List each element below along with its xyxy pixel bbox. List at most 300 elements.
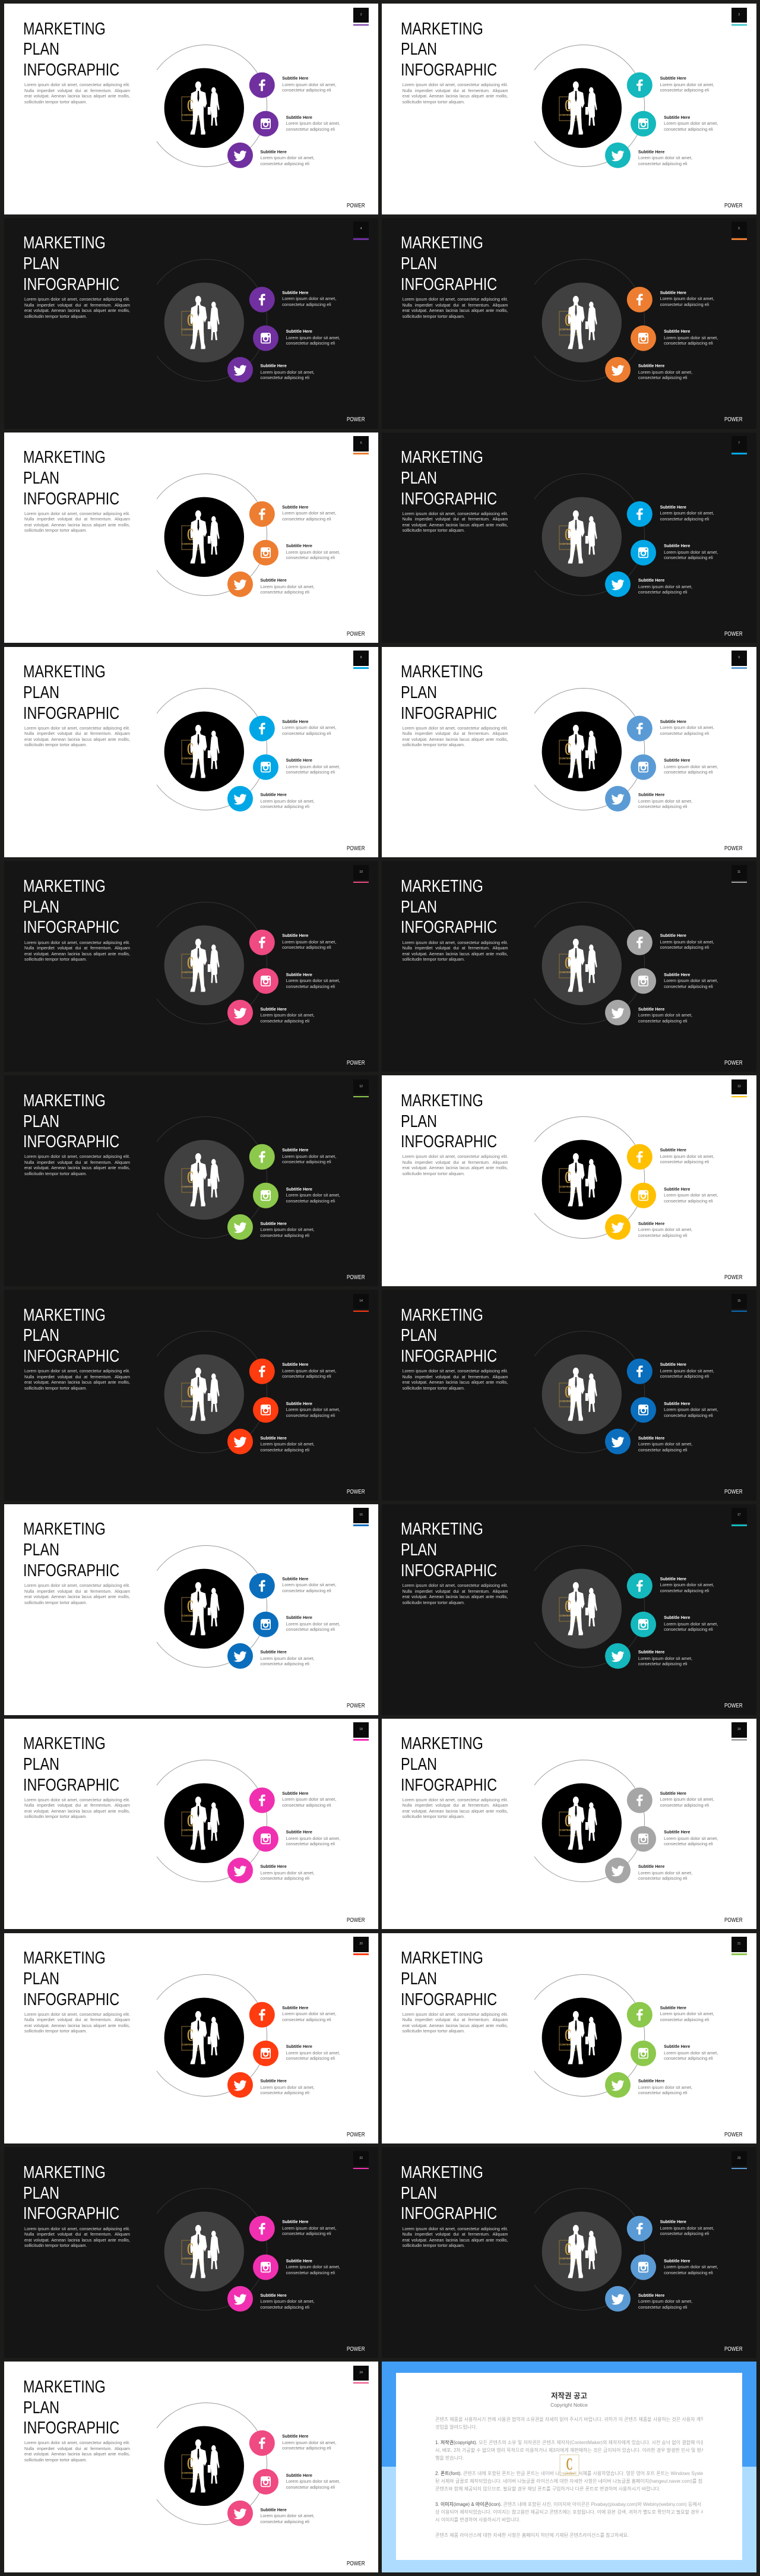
icon: facebook — [636, 1794, 643, 1806]
body text: erat volutpat. Aenean lacinia lacus aliquet ante mollis, — [24, 1594, 130, 1599]
page number: 22 — [359, 2157, 363, 2160]
center circle — [542, 926, 622, 1005]
page number: 8 — [360, 656, 362, 659]
title: INFOGRAPHIC — [401, 918, 497, 937]
callout 1: Lorem ipsum dolor sit amet, — [660, 510, 714, 516]
title: PLAN — [401, 1540, 437, 1560]
page number: 24 — [359, 2371, 363, 2375]
callout 3: consectetur adipiscing eli — [260, 2519, 309, 2524]
callout 2 — [664, 329, 718, 346]
title: INFOGRAPHIC — [401, 490, 497, 509]
callout 2 — [664, 971, 718, 989]
callout 1 — [660, 2218, 714, 2237]
page number: 21 — [737, 1942, 740, 1946]
social circles — [605, 72, 656, 168]
watermark logo: CONTENT — [563, 2472, 576, 2475]
callout 1 — [282, 2004, 336, 2022]
callout 1: Lorem ipsum dolor sit amet, — [282, 510, 336, 516]
callout 3: consectetur adipiscing eli — [260, 1661, 309, 1666]
title: PLAN — [401, 1969, 437, 1988]
people silhouettes — [190, 510, 219, 563]
body text: sollicitudin tempor tortor aliquam. — [24, 528, 87, 533]
icon: twitter — [612, 2294, 625, 2305]
diagram — [534, 473, 656, 597]
page number — [353, 865, 369, 880]
title: PLAN — [23, 1969, 59, 1988]
callout 2: Subtitle Here — [286, 329, 312, 334]
body text — [403, 2226, 508, 2249]
icon: facebook — [636, 1580, 643, 1592]
body text: Lorem ipsum dolor sit amet, consectetur adipiscing elit. — [24, 1583, 130, 1588]
icon: instagram — [260, 1619, 271, 1630]
light blue lower band — [382, 2467, 756, 2572]
icon: twitter — [612, 1437, 625, 1447]
logo: CONTENT — [182, 328, 194, 331]
body text: Nulla imperdiet volutpat dui at fermentum. Aliquam — [24, 1802, 130, 1808]
icon: instagram — [638, 118, 648, 129]
page number: 15 — [737, 1299, 740, 1302]
logo letter: C — [186, 740, 194, 758]
panel: slide 16 — [4, 1504, 378, 1715]
accent bar — [353, 2168, 369, 2169]
callout 3: Subtitle Here — [638, 1649, 664, 1655]
accent bar — [353, 453, 369, 454]
diagram — [4, 2147, 378, 2358]
callout 1: Subtitle Here — [660, 75, 686, 81]
callout 1: Lorem ipsum dolor sit amet, — [282, 296, 336, 301]
callout 1: consectetur adipiscing eli — [282, 87, 331, 93]
title: INFOGRAPHIC — [23, 704, 119, 723]
center circle — [542, 1568, 622, 1649]
accent bar — [353, 1311, 369, 1312]
title: INFOGRAPHIC — [23, 1132, 119, 1151]
title — [401, 1519, 497, 1581]
callout 3 — [260, 1649, 315, 1667]
callout 1: consectetur adipiscing eli — [282, 1588, 331, 1593]
body text: Nulla imperdiet volutpat dui at fermentum. Aliquam — [24, 2017, 130, 2022]
icon: twitter — [233, 1865, 246, 1876]
page number: 12 — [359, 1085, 363, 1088]
title: INFOGRAPHIC — [23, 1347, 119, 1366]
body text: Nulla imperdiet volutpat dui at fermentum. Aliquam — [24, 1160, 130, 1165]
title: INFOGRAPHIC — [401, 1990, 497, 2009]
callout 3 — [638, 1863, 692, 1882]
orbit ring — [157, 1117, 267, 1239]
notice text: 행을 받습니다. — [435, 2455, 464, 2461]
title — [401, 233, 497, 294]
body text: sollicitudin tempor tortor aliquam. — [403, 1171, 465, 1176]
page number: 19 — [737, 1728, 740, 1731]
accent bar — [732, 453, 747, 454]
orbit ring — [157, 1331, 267, 1453]
orbit ring — [157, 2189, 267, 2310]
icon: facebook — [259, 722, 265, 734]
logo — [559, 1598, 577, 1621]
title: PLAN — [401, 1326, 437, 1345]
icon: twitter — [612, 1008, 625, 1019]
logo — [559, 311, 577, 335]
callout 3: consectetur adipiscing eli — [638, 1447, 687, 1452]
center circle — [542, 1783, 622, 1863]
body text: sollicitudin tempor tortor aliquam. — [403, 742, 465, 747]
brand: POWER — [347, 1917, 365, 1924]
callout 3: consectetur adipiscing eli — [260, 160, 309, 166]
diagram — [382, 1075, 756, 1286]
icon: instagram — [260, 1833, 271, 1844]
callout 3: Subtitle Here — [260, 577, 287, 583]
body text: Lorem ipsum dolor sit amet, consectetur adipiscing elit. — [24, 82, 130, 87]
page number — [732, 865, 747, 880]
logo: CONTENT — [182, 757, 194, 759]
callout 1: consectetur adipiscing eli — [660, 2016, 709, 2022]
logo: CONTENT — [559, 1614, 572, 1617]
title — [23, 2163, 119, 2224]
logo letter: C — [565, 2026, 571, 2044]
icon: facebook — [259, 1794, 265, 1806]
callout 3: consectetur adipiscing eli — [260, 2090, 309, 2095]
callout 3 — [260, 2506, 315, 2524]
accent bar — [353, 2382, 369, 2384]
center circle — [542, 2212, 622, 2291]
callout 2 — [286, 114, 340, 132]
body text: sollicitudin tempor tortor aliquam. — [24, 1814, 87, 1819]
page number — [732, 1294, 747, 1309]
body text — [403, 511, 508, 533]
callout 3 — [260, 1006, 315, 1024]
callout 1 — [282, 1361, 336, 1379]
panel: slide 12 — [4, 1075, 378, 1286]
social circles — [227, 2002, 278, 2097]
callout 3: Subtitle Here — [638, 2293, 664, 2298]
logo: CONTENT — [559, 757, 572, 759]
body text: Nulla imperdiet volutpat dui at fermentum. Aliquam — [403, 1374, 508, 1379]
social circles — [605, 1359, 656, 1454]
body text: sollicitudin tempor tortor aliquam. — [403, 528, 465, 533]
title: MARKETING — [23, 448, 105, 467]
body text: Nulla imperdiet volutpat dui at fermentum. Aliquam — [403, 2017, 508, 2022]
diagram — [157, 688, 278, 812]
center circle — [164, 1997, 243, 2077]
callout 2: Subtitle Here — [286, 543, 312, 548]
body text: Nulla imperdiet volutpat dui at fermentum. Aliquam — [24, 731, 130, 736]
people silhouettes — [190, 725, 219, 778]
orbit ring — [534, 259, 645, 381]
callout 2: Lorem ipsum dolor sit amet, — [286, 2479, 340, 2484]
icon: twitter — [612, 579, 625, 590]
callout 1: Lorem ipsum dolor sit amet, — [660, 939, 714, 945]
callout 2 — [286, 1400, 340, 1418]
callout 3: Lorem ipsum dolor sit amet, — [638, 1656, 692, 1661]
callout 2: consectetur adipiscing eli — [286, 555, 335, 560]
body text: erat volutpat. Aenean lacinia lacus aliquet ante mollis, — [24, 93, 130, 99]
title: INFOGRAPHIC — [23, 2204, 119, 2223]
callout 3: Lorem ipsum dolor sit amet, — [638, 2299, 692, 2304]
icon: twitter — [233, 1651, 246, 1662]
title — [401, 448, 497, 509]
social circles — [227, 2216, 278, 2312]
callout 3: Subtitle Here — [638, 1435, 664, 1440]
body text — [24, 511, 130, 533]
logo — [182, 1383, 198, 1407]
logo: CONTENT — [182, 542, 194, 545]
page number — [353, 1722, 369, 1738]
accent bar — [353, 238, 369, 240]
callout 2: Lorem ipsum dolor sit amet, — [286, 335, 340, 340]
callout 3: Subtitle Here — [260, 363, 287, 368]
panel: slide 15 — [382, 1290, 756, 1501]
body text: Nulla imperdiet volutpat dui at fermentum. Aliquam — [403, 516, 508, 522]
callout 2: Lorem ipsum dolor sit amet, — [286, 2050, 340, 2056]
brand: POWER — [347, 1702, 365, 1709]
body text: Lorem ipsum dolor sit amet, consectetur adipiscing elit. — [24, 511, 130, 516]
body text — [24, 82, 130, 105]
diagram — [157, 473, 278, 597]
callout 1 — [282, 504, 336, 522]
logo — [182, 2240, 198, 2264]
body text: sollicitudin tempor tortor aliquam. — [24, 1385, 87, 1391]
callout 1: Lorem ipsum dolor sit amet, — [660, 1368, 714, 1374]
callout 3 — [260, 791, 315, 809]
body text: Lorem ipsum dolor sit amet, consectetur adipiscing elit. — [403, 725, 508, 731]
body text — [24, 1797, 130, 1820]
callout 1: Lorem ipsum dolor sit amet, — [282, 939, 336, 945]
callout 1 — [282, 719, 336, 735]
callout 3: consectetur adipiscing eli — [260, 1447, 309, 1452]
callout 3: consectetur adipiscing eli — [638, 589, 687, 595]
social circles — [227, 1359, 278, 1454]
logo letter: C — [565, 525, 571, 544]
body text: sollicitudin tempor tortor aliquam. — [24, 2028, 87, 2034]
logo: CONTENT — [182, 2043, 194, 2046]
callout 3: Lorem ipsum dolor sit amet, — [260, 1441, 315, 1447]
callout 2: consectetur adipiscing eli — [286, 340, 335, 346]
body text: Lorem ipsum dolor sit amet, consectetur adipiscing elit. — [403, 296, 508, 302]
callout 2: Lorem ipsum dolor sit amet, — [664, 2050, 718, 2056]
icon: instagram — [260, 2048, 271, 2059]
body text — [24, 2012, 130, 2034]
title: INFOGRAPHIC — [401, 704, 497, 723]
body text — [24, 1583, 130, 1605]
callout 2: Subtitle Here — [286, 972, 312, 977]
icon: instagram — [638, 1619, 648, 1630]
callout 2 — [286, 1614, 340, 1633]
body text: erat volutpat. Aenean lacinia lacus aliquet ante mollis, — [24, 308, 130, 313]
brand: POWER — [724, 1274, 743, 1281]
body text: sollicitudin tempor tortor aliquam. — [403, 956, 465, 962]
social circles — [605, 1144, 656, 1240]
icon: instagram — [260, 976, 271, 986]
callout 1: consectetur adipiscing eli — [660, 945, 709, 950]
logo — [559, 954, 577, 978]
callout 3: Subtitle Here — [638, 2078, 664, 2083]
title: MARKETING — [401, 233, 483, 252]
callout 1 — [660, 932, 714, 951]
accent bar — [353, 1739, 369, 1741]
body text: sollicitudin tempor tortor aliquam. — [24, 742, 87, 747]
diagram — [382, 646, 756, 858]
accent bar — [353, 667, 369, 669]
page number — [353, 1937, 369, 1952]
icon: twitter — [612, 365, 625, 375]
callout 3: Lorem ipsum dolor sit amet, — [638, 1441, 692, 1447]
callout 1: Subtitle Here — [660, 2219, 686, 2224]
icon: twitter — [612, 1223, 625, 1233]
title: INFOGRAPHIC — [401, 1561, 497, 1580]
callout 3: Lorem ipsum dolor sit amet, — [638, 370, 692, 375]
callout 1: Lorem ipsum dolor sit amet, — [282, 725, 336, 730]
title: PLAN — [401, 2184, 437, 2203]
callout 1: consectetur adipiscing eli — [660, 302, 709, 307]
callout 2: Lorem ipsum dolor sit amet, — [664, 121, 718, 126]
callout 2: consectetur adipiscing eli — [286, 1198, 335, 1204]
callout 2: consectetur adipiscing eli — [664, 1413, 713, 1418]
icon: twitter — [233, 794, 246, 804]
title: INFOGRAPHIC — [23, 2419, 119, 2438]
center circle — [542, 1997, 622, 2077]
title: MARKETING — [401, 662, 483, 681]
logo — [559, 1383, 577, 1407]
title — [23, 448, 119, 509]
callout 2: consectetur adipiscing eli — [286, 2056, 335, 2061]
page number: 4 — [360, 227, 362, 231]
callout 3 — [638, 1434, 692, 1453]
diagram — [382, 2147, 756, 2358]
callout 1: Lorem ipsum dolor sit amet, — [282, 1582, 336, 1587]
callout 1: Subtitle Here — [282, 1791, 308, 1796]
callout 3 — [260, 2078, 315, 2096]
callout 2: consectetur adipiscing eli — [286, 1841, 335, 1846]
callout 1: Lorem ipsum dolor sit amet, — [660, 2225, 714, 2231]
logo — [559, 2026, 577, 2050]
icon: facebook — [636, 80, 643, 91]
brand: POWER — [724, 630, 743, 637]
callout 2: Subtitle Here — [664, 329, 690, 334]
icon: twitter — [233, 1223, 246, 1233]
title: PLAN — [401, 1755, 437, 1774]
title: MARKETING — [23, 1306, 105, 1325]
callout 2 — [664, 1186, 718, 1204]
title — [401, 2163, 497, 2224]
callout 2: Subtitle Here — [664, 1829, 690, 1835]
brand: POWER — [347, 1488, 365, 1495]
body text — [24, 296, 130, 319]
accent bar — [732, 1739, 747, 1741]
callout 2: Lorem ipsum dolor sit amet, — [286, 1192, 340, 1198]
callout 2: Subtitle Here — [664, 1186, 690, 1192]
body text: sollicitudin tempor tortor aliquam. — [403, 2243, 465, 2248]
center circle — [164, 926, 243, 1005]
panel: copyright notice — [382, 2362, 756, 2572]
title: PLAN — [401, 898, 437, 917]
body text: Nulla imperdiet volutpat dui at fermentum. Aliquam — [403, 1589, 508, 1594]
title — [23, 1948, 119, 2010]
panel: slide 3 — [382, 4, 756, 214]
callout 2 — [286, 329, 340, 346]
social circles — [227, 2430, 278, 2526]
body text: Nulla imperdiet volutpat dui at fermentum. Aliquam — [24, 2231, 130, 2237]
body text: Lorem ipsum dolor sit amet, consectetur adipiscing elit. — [403, 1797, 508, 1802]
social circles — [227, 930, 278, 1025]
icon: facebook — [259, 937, 265, 948]
callout 3 — [260, 577, 315, 595]
accent bar — [732, 1311, 747, 1312]
callout 1: Lorem ipsum dolor sit amet, — [660, 296, 714, 301]
callout 1: Subtitle Here — [660, 290, 686, 295]
brand: POWER — [724, 1917, 743, 1924]
title: MARKETING — [23, 1949, 105, 1968]
callout 2 — [286, 1186, 340, 1204]
panel: slide 10 — [4, 861, 378, 1072]
callout 3: Lorem ipsum dolor sit amet, — [260, 584, 315, 589]
title: MARKETING — [23, 233, 105, 252]
callout 1: Subtitle Here — [660, 1147, 686, 1153]
accent bar — [732, 24, 747, 26]
callout 2: consectetur adipiscing eli — [664, 340, 713, 346]
panel: slide 17 — [382, 1504, 756, 1715]
callout 3: consectetur adipiscing eli — [638, 160, 687, 166]
people silhouettes — [190, 296, 219, 349]
brand: POWER — [347, 2345, 365, 2353]
social circles — [605, 501, 656, 597]
callout 1: consectetur adipiscing eli — [282, 2016, 331, 2022]
body text: Lorem ipsum dolor sit amet, consectetur adipiscing elit. — [403, 2226, 508, 2231]
callout 1: consectetur adipiscing eli — [660, 516, 709, 522]
icon: instagram — [638, 1190, 648, 1201]
icon: twitter — [233, 2294, 246, 2305]
title: MARKETING — [401, 20, 483, 39]
callout 2: Subtitle Here — [286, 1186, 312, 1192]
body text — [403, 940, 508, 962]
logo letter: C — [565, 1811, 571, 1830]
callout 3: Lorem ipsum dolor sit amet, — [638, 1012, 692, 1018]
title: MARKETING — [401, 1520, 483, 1539]
callout 1 — [282, 2218, 336, 2237]
callout 1: Subtitle Here — [282, 2219, 308, 2224]
body text: Nulla imperdiet volutpat dui at fermentum. Aliquam — [24, 2446, 130, 2451]
body text: erat volutpat. Aenean lacinia lacus aliquet ante mollis, — [24, 1379, 130, 1385]
title: MARKETING — [23, 877, 105, 896]
callout 1 — [660, 504, 714, 522]
center circle — [164, 2212, 243, 2291]
people silhouettes — [568, 939, 597, 992]
title: INFOGRAPHIC — [401, 61, 497, 80]
icon: facebook — [636, 937, 643, 948]
title: INFOGRAPHIC — [401, 2204, 497, 2223]
callout 2: consectetur adipiscing eli — [664, 2056, 713, 2061]
people silhouettes — [568, 1153, 597, 1207]
logo letter: C — [565, 311, 571, 329]
orbit ring — [157, 259, 267, 381]
center circle — [164, 497, 243, 577]
logo — [559, 2240, 577, 2264]
callout 1: Subtitle Here — [282, 1362, 308, 1367]
orbit ring — [157, 1974, 267, 2096]
center circle — [542, 711, 622, 791]
title — [401, 662, 497, 724]
callout 2: Lorem ipsum dolor sit amet, — [664, 335, 718, 340]
title: PLAN — [23, 898, 59, 917]
callout 2: consectetur adipiscing eli — [286, 1627, 335, 1632]
callout 3: Subtitle Here — [260, 149, 287, 154]
callout 3 — [638, 149, 692, 166]
body text: Lorem ipsum dolor sit amet, consectetur adipiscing elit. — [24, 1154, 130, 1159]
title: MARKETING — [23, 2378, 105, 2397]
title: PLAN — [401, 683, 437, 702]
page number — [732, 1508, 747, 1523]
people silhouettes — [190, 2439, 219, 2493]
callout 1: consectetur adipiscing eli — [660, 1588, 709, 1593]
callout 1: consectetur adipiscing eli — [282, 516, 331, 522]
